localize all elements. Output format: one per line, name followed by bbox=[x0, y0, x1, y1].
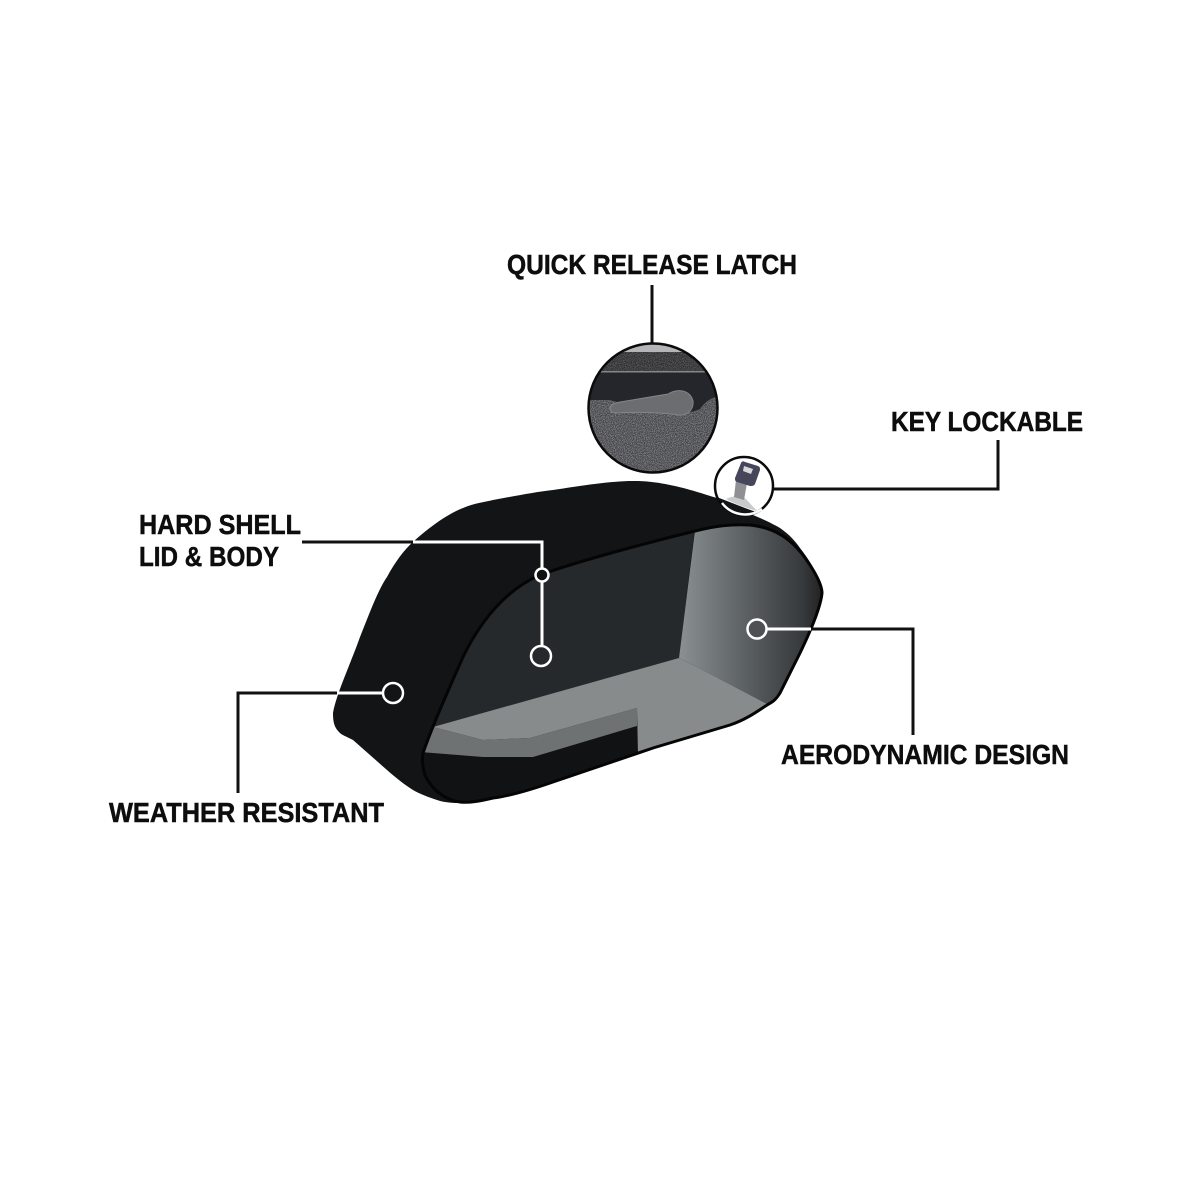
callout: hard shell lid and body bbox=[139, 509, 551, 666]
label: WEATHER RESISTANT bbox=[109, 797, 384, 828]
latch detail circle bbox=[590, 344, 716, 472]
label: AERODYNAMIC DESIGN bbox=[781, 739, 1069, 770]
label: KEY LOCKABLE bbox=[891, 406, 1083, 437]
front face bbox=[422, 525, 822, 802]
label: HARD SHELL bbox=[139, 509, 301, 540]
callout: aerodynamic design bbox=[748, 620, 1069, 770]
key icon circle bbox=[716, 458, 772, 514]
saddlebag illustration bbox=[333, 481, 830, 803]
callout: quick release latch bbox=[507, 249, 797, 476]
callout: key lockable bbox=[714, 406, 1083, 522]
floor bbox=[433, 658, 767, 755]
back wall bbox=[434, 533, 694, 726]
side wall bbox=[679, 526, 820, 704]
label: QUICK RELEASE LATCH bbox=[507, 249, 797, 280]
floor lip bbox=[420, 708, 637, 757]
callout: weather resistant bbox=[109, 683, 403, 828]
bag shell bbox=[333, 481, 822, 803]
callout: hard shell lid and body: LID & BODY bbox=[139, 541, 279, 572]
face outline bbox=[422, 525, 822, 802]
